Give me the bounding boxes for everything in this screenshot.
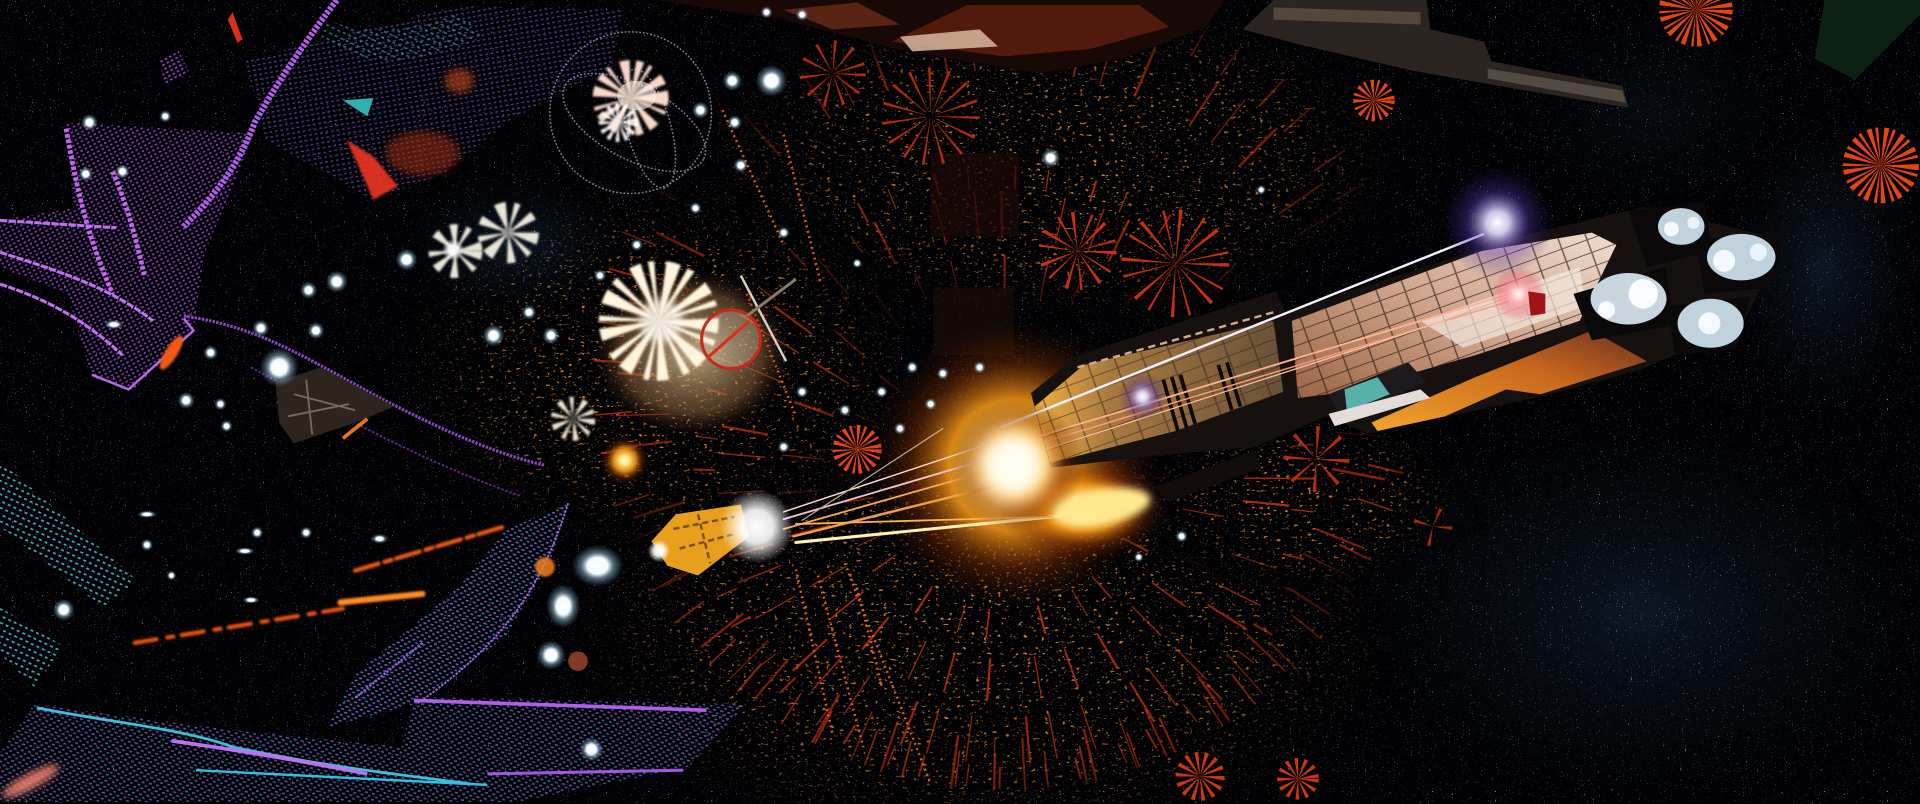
ember field [410, 26, 1454, 804]
small ships lower centre [535, 436, 649, 671]
explosion core over hull [949, 398, 1084, 533]
cyan mesh left [0, 460, 137, 687]
orange dotted tracks [722, 110, 931, 784]
engine nozzles [1591, 208, 1776, 348]
small orange ship [648, 490, 793, 576]
wire sphere [548, 32, 721, 193]
orange tracer streaks [135, 527, 504, 643]
ship dark base [1031, 207, 1785, 468]
explosion glow [869, 321, 1169, 610]
top structure: station hull [655, 0, 1224, 355]
violet flare [1441, 167, 1554, 279]
lower left mesh [0, 122, 255, 391]
top structure: gantry [1243, 0, 1629, 108]
main battleship [1000, 167, 1785, 502]
burst: top white firework [610, 81, 656, 131]
ship orange underbelly [1371, 331, 1647, 431]
ship mid hull [1292, 233, 1616, 398]
burst: small white [564, 410, 582, 427]
lower impact glow [1051, 482, 1153, 532]
nebula haze [404, 12, 1916, 796]
purple mesh cloud [0, 0, 622, 496]
burst: white sparks left [442, 220, 520, 262]
ship forward hull [1035, 312, 1283, 463]
cyan and purple mesh centre [327, 503, 568, 727]
laser beams to explosion [784, 429, 1078, 542]
black chevron stripes [1163, 362, 1240, 431]
ship teal panel and light deck [1329, 362, 1430, 426]
burst: red fireworks [816, 0, 1899, 789]
upper mesh [245, 6, 622, 200]
red turrets [1528, 291, 1545, 316]
bright purple streaks [184, 0, 337, 227]
small enemy ship left [260, 348, 394, 443]
radial red sparks [612, 0, 1396, 778]
scattered white plasma orbs [53, 6, 1266, 762]
ship lower turret [1153, 451, 1261, 502]
target ring ship [702, 276, 796, 369]
red glow in purple cloud [156, 12, 474, 373]
top right structure [1815, 0, 1920, 80]
hull flares [1118, 372, 1167, 421]
burst: large white with halo [594, 269, 790, 436]
engine pod dark blocks [1573, 202, 1785, 355]
cyan and purple mesh bottom [0, 697, 746, 802]
ship hull beams [1000, 234, 1510, 452]
ember glow bottom left [0, 760, 62, 803]
teal band [321, 12, 484, 60]
